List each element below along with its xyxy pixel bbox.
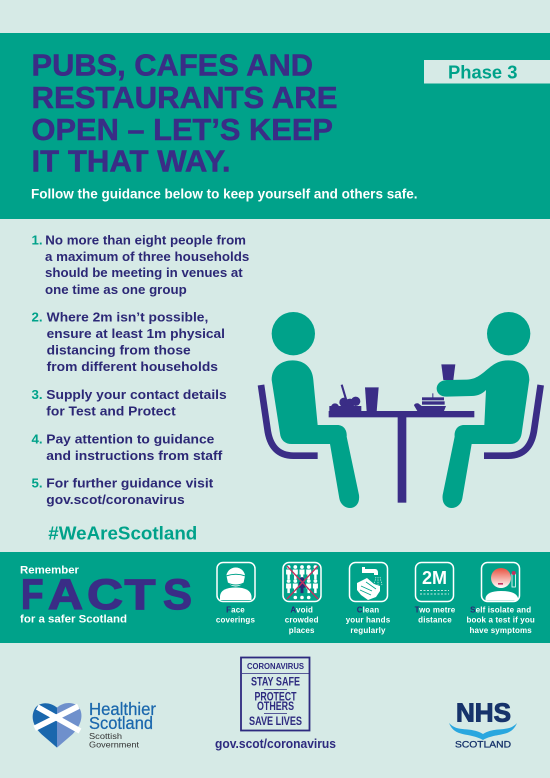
icon: right plate with sandwich — [414, 393, 446, 411]
phase badge: Phase 3 — [448, 62, 518, 82]
label: self isolate: Self isolate and — [470, 606, 531, 615]
item 1: one time as one group — [45, 282, 187, 297]
panel: FACTS band — [0, 552, 550, 643]
icon: two metre distance — [416, 562, 454, 602]
item 1: No more than eight people from — [45, 232, 246, 247]
logo: stay safe box: PROTECT — [254, 692, 296, 704]
icon: left person — [272, 312, 359, 508]
icon: left plate of food — [329, 384, 361, 412]
label: two metre distance: distance — [418, 616, 452, 625]
item 2: 2. — [32, 310, 43, 325]
FACTS heading: C — [87, 571, 123, 619]
icon: avoid crowded places — [283, 562, 321, 602]
title: OPEN – LET’S KEEP — [32, 112, 333, 147]
title — [32, 48, 338, 179]
logo: NHS Scotland: NHS — [456, 698, 511, 728]
guidance list — [32, 232, 249, 507]
item 3 — [32, 387, 227, 419]
label: clean hands: your hands — [346, 616, 391, 625]
label: avoid crowded places: places — [289, 626, 315, 635]
icon: saltire heart — [33, 703, 81, 748]
FACTS heading — [20, 564, 192, 626]
logo: stay safe box: OTHERS — [257, 701, 294, 713]
icon: two metre distance: 2M — [422, 568, 447, 588]
logo: Healthier Scotland: Healthier — [89, 699, 156, 719]
icon: left drink — [365, 387, 379, 412]
logo: Healthier Scotland — [33, 699, 156, 750]
item 5: gov.scot/coronavirus — [46, 492, 185, 507]
item 3: for Test and Protect — [46, 404, 176, 419]
icon: right person — [437, 312, 530, 508]
label: self isolate: have symptoms — [469, 626, 532, 635]
item 4: 4. — [32, 431, 43, 446]
logo: stay safe box: STAY SAFE — [251, 677, 300, 689]
icon: self isolate — [482, 562, 520, 602]
icon: right drink — [441, 364, 455, 380]
item 1 — [32, 232, 249, 297]
label: clean hands: Clean — [357, 606, 379, 615]
item 5 — [32, 475, 214, 507]
label: self isolate: book a test if you — [466, 616, 535, 625]
phase badge — [424, 60, 550, 84]
title: IT THAT WAY. — [32, 144, 230, 179]
icon: left chair — [261, 385, 318, 456]
logo: Healthier Scotland: Scotland — [89, 713, 153, 733]
item 3: 3. — [32, 387, 43, 402]
item 2: from different households — [47, 359, 218, 374]
logo: stay safe box: CORONAVIRUS — [247, 662, 305, 671]
FACTS heading: for a safer Scotland — [20, 614, 127, 626]
item 5: 5. — [32, 475, 43, 490]
subtitle: Follow the guidance below to keep yourself and others safe. — [31, 186, 418, 201]
icon: clean hands — [350, 562, 388, 602]
logo: NHS Scotland — [449, 698, 517, 751]
icon: face covering — [217, 562, 255, 602]
logo: stay safe box: SAVE LIVES — [249, 716, 302, 728]
item 1: should be meeting in venues at — [45, 265, 243, 280]
item 1: 1. — [32, 232, 43, 247]
web address: gov.scot/coronavirus — [215, 737, 336, 751]
illustration: two people at a table — [261, 312, 541, 508]
label: avoid crowded places: Avoid — [290, 606, 313, 615]
title: RESTAURANTS ARE — [32, 80, 338, 115]
label: face coverings: coverings — [216, 616, 255, 625]
label: face coverings: Face — [226, 606, 245, 615]
item 3: Supply your contact details — [46, 387, 227, 402]
hashtag: #WeAreScotland — [48, 522, 197, 544]
item 4: Pay attention to guidance — [46, 431, 214, 446]
label: clean hands: regularly — [350, 626, 386, 635]
FACTS heading: T — [124, 571, 156, 619]
logo: Healthier Scotland: Government — [89, 740, 140, 750]
item 2: distancing from those — [47, 342, 191, 358]
title: PUBS, CAFES AND — [32, 48, 313, 82]
item 2: Where 2m isn’t possible, — [47, 310, 208, 325]
item 2: ensure at least 1m physical — [47, 326, 225, 341]
item 4 — [32, 431, 223, 463]
FACTS heading: F — [21, 571, 44, 619]
panel: header — [0, 33, 550, 219]
item 4: and instructions from staff — [46, 448, 223, 463]
FACTS heading: A — [48, 571, 83, 619]
icon: right chair — [484, 385, 541, 456]
logo: NHS Scotland: SCOTLAND — [455, 740, 511, 751]
icon: table — [329, 411, 474, 503]
label: avoid crowded places: crowded — [285, 616, 319, 625]
item 1: a maximum of three households — [45, 249, 249, 264]
FACTS heading: Remember — [20, 564, 80, 576]
label: two metre distance: Two metre — [415, 606, 455, 615]
item 2 — [32, 310, 225, 374]
FACTS heading: S — [163, 571, 192, 619]
logo: stay safe box — [241, 658, 310, 730]
logo: Healthier Scotland: Scottish — [89, 731, 122, 741]
item 5: For further guidance visit — [46, 475, 214, 490]
